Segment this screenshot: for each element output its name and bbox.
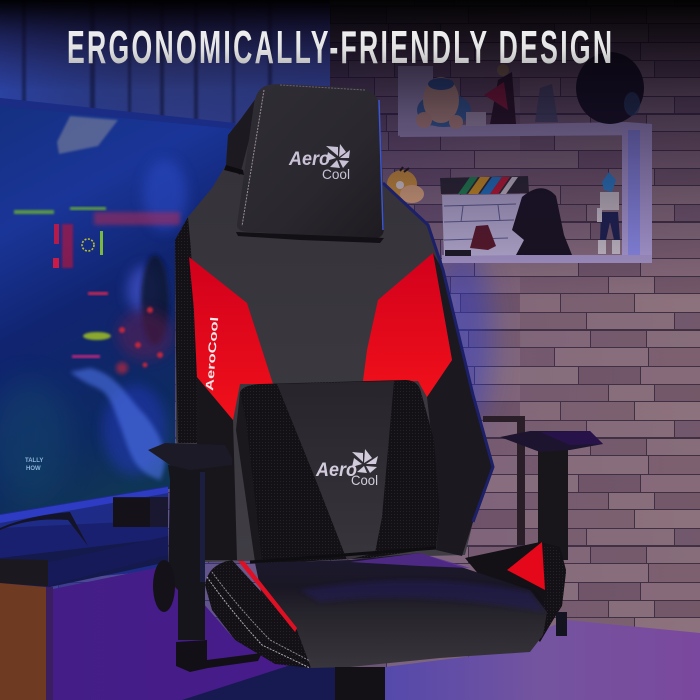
headrest: [224, 84, 384, 243]
upper shelf frame: [398, 66, 652, 263]
lumbar logo: Cool: [351, 472, 378, 488]
right seat wing: [465, 542, 567, 642]
left seat wing: [205, 560, 311, 668]
seat cushion: [255, 553, 547, 668]
screen reflection: [57, 116, 118, 154]
headrest logo: [288, 144, 350, 182]
lumbar logo: Aero: [315, 460, 357, 481]
console wood front: [0, 583, 46, 700]
soundbar: [113, 497, 168, 527]
screen caption: [25, 458, 43, 472]
left armrest: [148, 443, 262, 672]
panel: wall shelves with collectibles: [387, 52, 652, 263]
panel: floor: [345, 620, 700, 700]
icon: helmet figure: [512, 188, 572, 255]
icon: shelf figures: [466, 52, 644, 126]
screen artwork: [0, 159, 187, 500]
chair base column: [335, 667, 385, 700]
panel: curtain: [0, 0, 330, 135]
title: ERGONOMICALLY-FRIENDLY DESIGN: [67, 21, 614, 73]
screen caption: HOW: [26, 466, 41, 472]
lumbar pillow: [236, 380, 440, 564]
right red panel: [363, 253, 452, 397]
chair back shell: [175, 90, 493, 562]
icon: duck plush: [387, 167, 424, 203]
console top: [0, 538, 168, 587]
console purple front: [46, 587, 53, 700]
panel: television: [0, 98, 235, 515]
headrest logo: Cool: [322, 166, 350, 182]
left red panel: [189, 257, 273, 420]
screen caption: TALLY: [25, 458, 43, 464]
lumbar logo: [315, 449, 378, 488]
panel: gaming chair: [148, 84, 603, 700]
panel: media console and soundbar: [0, 486, 345, 700]
right armrest: [500, 431, 603, 560]
TV stand: [0, 512, 88, 546]
panel: desk behind chair: [483, 416, 525, 545]
icon: plush toy: [416, 77, 471, 129]
icon: clapperboard: [440, 176, 530, 256]
icon: blue-haired figure: [597, 172, 620, 254]
side mesh strip: [175, 217, 197, 443]
side label: AeroCool: [204, 317, 221, 391]
headrest logo: Aero: [288, 149, 330, 170]
panel: wall dark vignette: [330, 0, 700, 300]
